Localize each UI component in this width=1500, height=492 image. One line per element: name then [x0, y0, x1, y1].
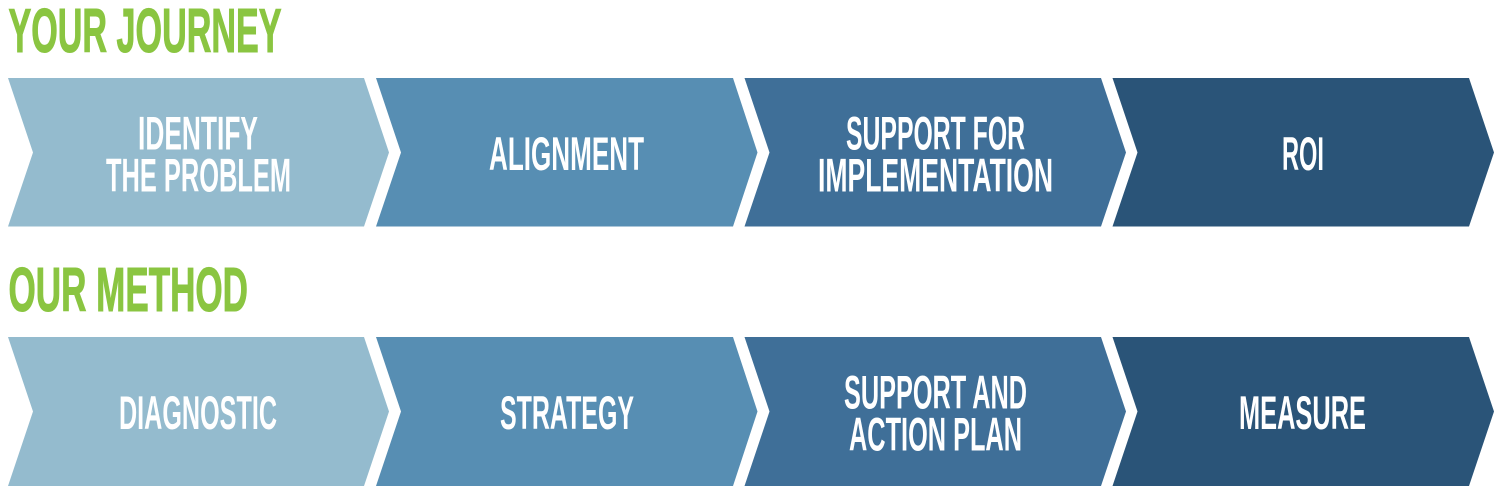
- chevron: diagnostic: [8, 337, 389, 486]
- chevron: measure: MEASURE: [1239, 387, 1366, 440]
- journey chevron row: [8, 78, 1494, 226]
- chevron: strategy: STRATEGY: [500, 387, 634, 440]
- chevron: roi: ROI: [1282, 128, 1324, 181]
- chevron: strategy: [376, 337, 758, 486]
- heading: our method: OUR METHOD: [8, 255, 248, 325]
- chevron: support and action plan: SUPPORT AND: [844, 366, 1027, 420]
- chevron: alignment: [376, 78, 758, 226]
- chevron: identify the problem: [8, 78, 389, 226]
- method chevron row: [8, 337, 1494, 486]
- chevron: roi: [1112, 78, 1494, 226]
- chevron: support for implementation: IMPLEMENTATION: [818, 150, 1053, 202]
- chevron: support and action plan: ACTION PLAN: [849, 408, 1022, 462]
- chevron: diagnostic: DIAGNOSTIC: [119, 387, 277, 440]
- chevron: support for implementation: SUPPORT FOR: [846, 108, 1025, 160]
- chevron: alignment: ALIGNMENT: [489, 128, 644, 181]
- chevron: support and action plan: [744, 337, 1126, 486]
- chevron: support for implementation: [744, 78, 1126, 226]
- chevron: identify the problem: THE PROBLEM: [106, 150, 291, 202]
- chevron: measure: [1112, 337, 1494, 486]
- chevron: identify the problem: IDENTIFY: [138, 108, 258, 160]
